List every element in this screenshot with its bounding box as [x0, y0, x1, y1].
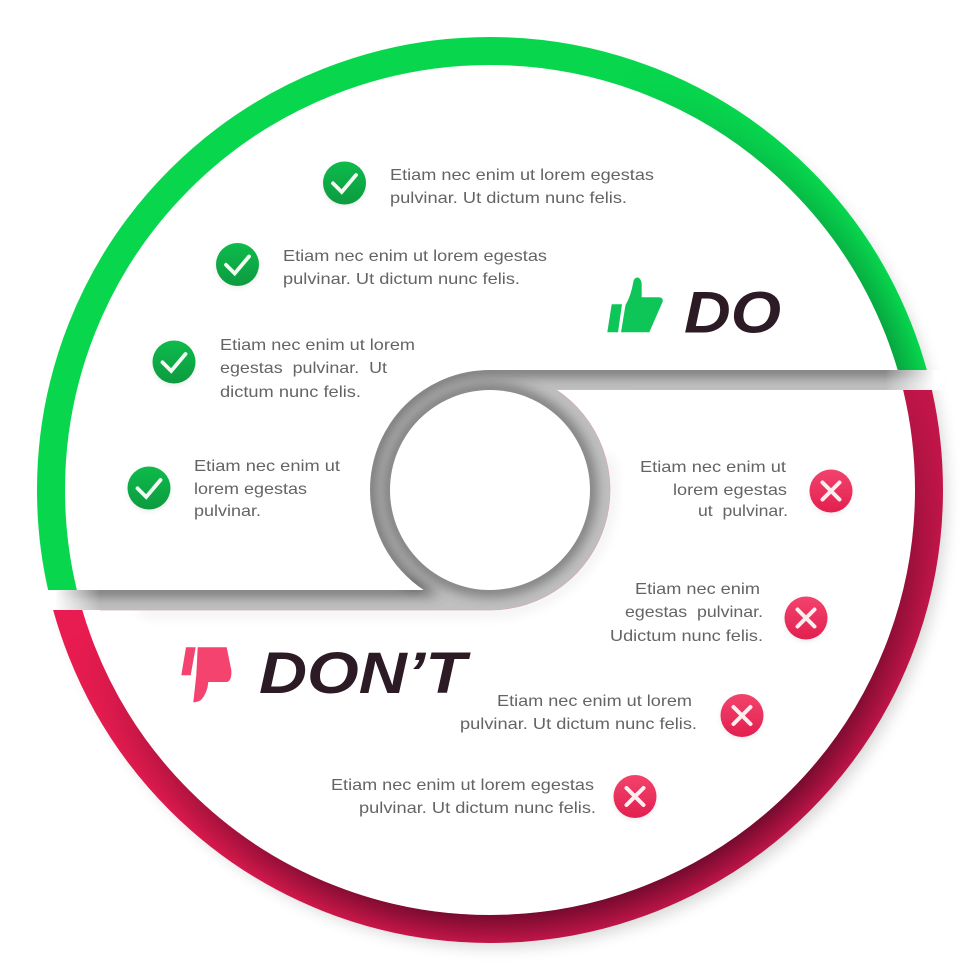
item: dont 3: pulvinar. Ut dictum nunc felis.	[460, 716, 697, 733]
item: dont 4: pulvinar. Ut dictum nunc felis.	[359, 800, 596, 817]
thin edge line around lower panel	[100, 390, 610, 610]
item: dont 1	[640, 459, 852, 520]
item: do 4: lorem egestas	[194, 481, 307, 498]
center white circle	[390, 390, 590, 590]
item: dont 3: Etiam nec enim ut lorem	[497, 693, 692, 710]
item: do 2: pulvinar. Ut dictum nunc felis.	[283, 271, 520, 288]
item: do 1: pulvinar. Ut dictum nunc felis.	[390, 190, 627, 207]
icon: thumbs down	[181, 647, 231, 702]
item: do 1: Etiam nec enim ut lorem egestas	[390, 167, 654, 184]
item: dont 4: Etiam nec enim ut lorem egestas	[331, 777, 594, 794]
item: do 2	[216, 243, 547, 288]
soft shadow of ring on lower panel	[140, 455, 611, 612]
item: do 4: Etiam nec enim ut	[194, 458, 341, 475]
item: do 3: egestas pulvinar. Ut	[220, 360, 388, 377]
item: do 2: Etiam nec enim ut lorem egestas	[283, 248, 547, 265]
grey channel: ring and bands	[58, 370, 939, 610]
item: dont 4	[331, 775, 656, 818]
item: do 4	[128, 458, 341, 520]
heading: DON'T: DON’T	[259, 641, 471, 706]
item: dont 1: ut pulvinar.	[698, 503, 788, 520]
item: do 4: pulvinar.	[194, 503, 261, 520]
item: dont 2	[610, 581, 828, 645]
icon: thumbs up	[607, 277, 663, 332]
item: dont 3	[460, 693, 764, 737]
item: do 3: dictum nunc felis.	[220, 384, 361, 401]
item: do 1	[323, 162, 654, 207]
item: do 3	[152, 337, 415, 401]
red DON'T arc	[53, 390, 943, 943]
heading: DO: DO	[684, 280, 781, 346]
item: dont 1: Etiam nec enim ut	[640, 459, 787, 476]
item: dont 1: lorem egestas	[673, 482, 787, 499]
item: dont 2: Etiam nec enim	[635, 581, 760, 598]
green DO arc	[37, 37, 927, 590]
item: dont 2: egestas pulvinar.	[625, 604, 763, 621]
item: do 3: Etiam nec enim ut lorem	[220, 337, 415, 354]
item: dont 2: Udictum nunc felis.	[610, 628, 763, 645]
